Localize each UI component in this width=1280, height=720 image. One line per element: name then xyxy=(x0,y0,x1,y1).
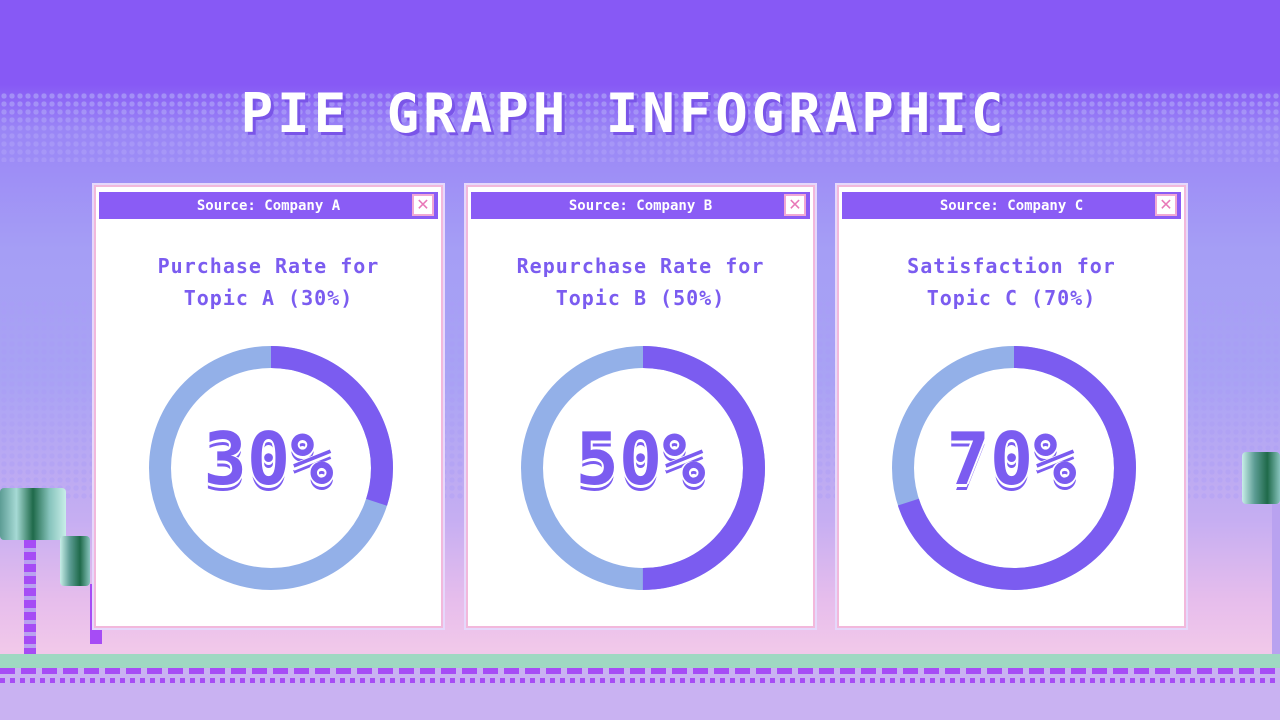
header bar C: ✕ xyxy=(1159,195,1173,214)
heading B: Topic B (50%) xyxy=(556,286,725,310)
value C: 70% xyxy=(946,417,1077,501)
donut chart B xyxy=(521,346,765,590)
header bar C xyxy=(842,192,1181,219)
donut chart A xyxy=(149,346,393,590)
panel: Company B xyxy=(466,185,815,628)
donut chart C xyxy=(892,346,1136,590)
header bar B: Source: Company B xyxy=(569,198,712,214)
panel: Company C xyxy=(837,185,1186,628)
header bar B xyxy=(471,192,810,219)
heading B: Repurchase Rate for xyxy=(517,254,764,278)
title: PIE GRAPH INFOGRAPHIC xyxy=(241,82,1007,145)
header bar B: ✕ xyxy=(788,195,802,214)
panel: Company A xyxy=(94,185,443,628)
heading C: Satisfaction for xyxy=(907,254,1116,278)
palm tree left xyxy=(0,488,102,654)
header bar C: Source: Company C xyxy=(940,198,1083,214)
ground xyxy=(0,654,1280,720)
header bar A: ✕ xyxy=(416,195,430,214)
heading A: Topic A (30%) xyxy=(184,286,353,310)
heading B xyxy=(517,254,764,310)
heading C xyxy=(907,254,1116,310)
heading A: Purchase Rate for xyxy=(158,254,379,278)
header bar A xyxy=(99,192,438,219)
heading A xyxy=(158,254,379,310)
value A: 30% xyxy=(203,417,334,501)
value B: 50% xyxy=(575,417,706,501)
palm tree right xyxy=(1242,452,1280,654)
header bar A: Source: Company A xyxy=(197,198,340,214)
heading C: Topic C (70%) xyxy=(927,286,1096,310)
